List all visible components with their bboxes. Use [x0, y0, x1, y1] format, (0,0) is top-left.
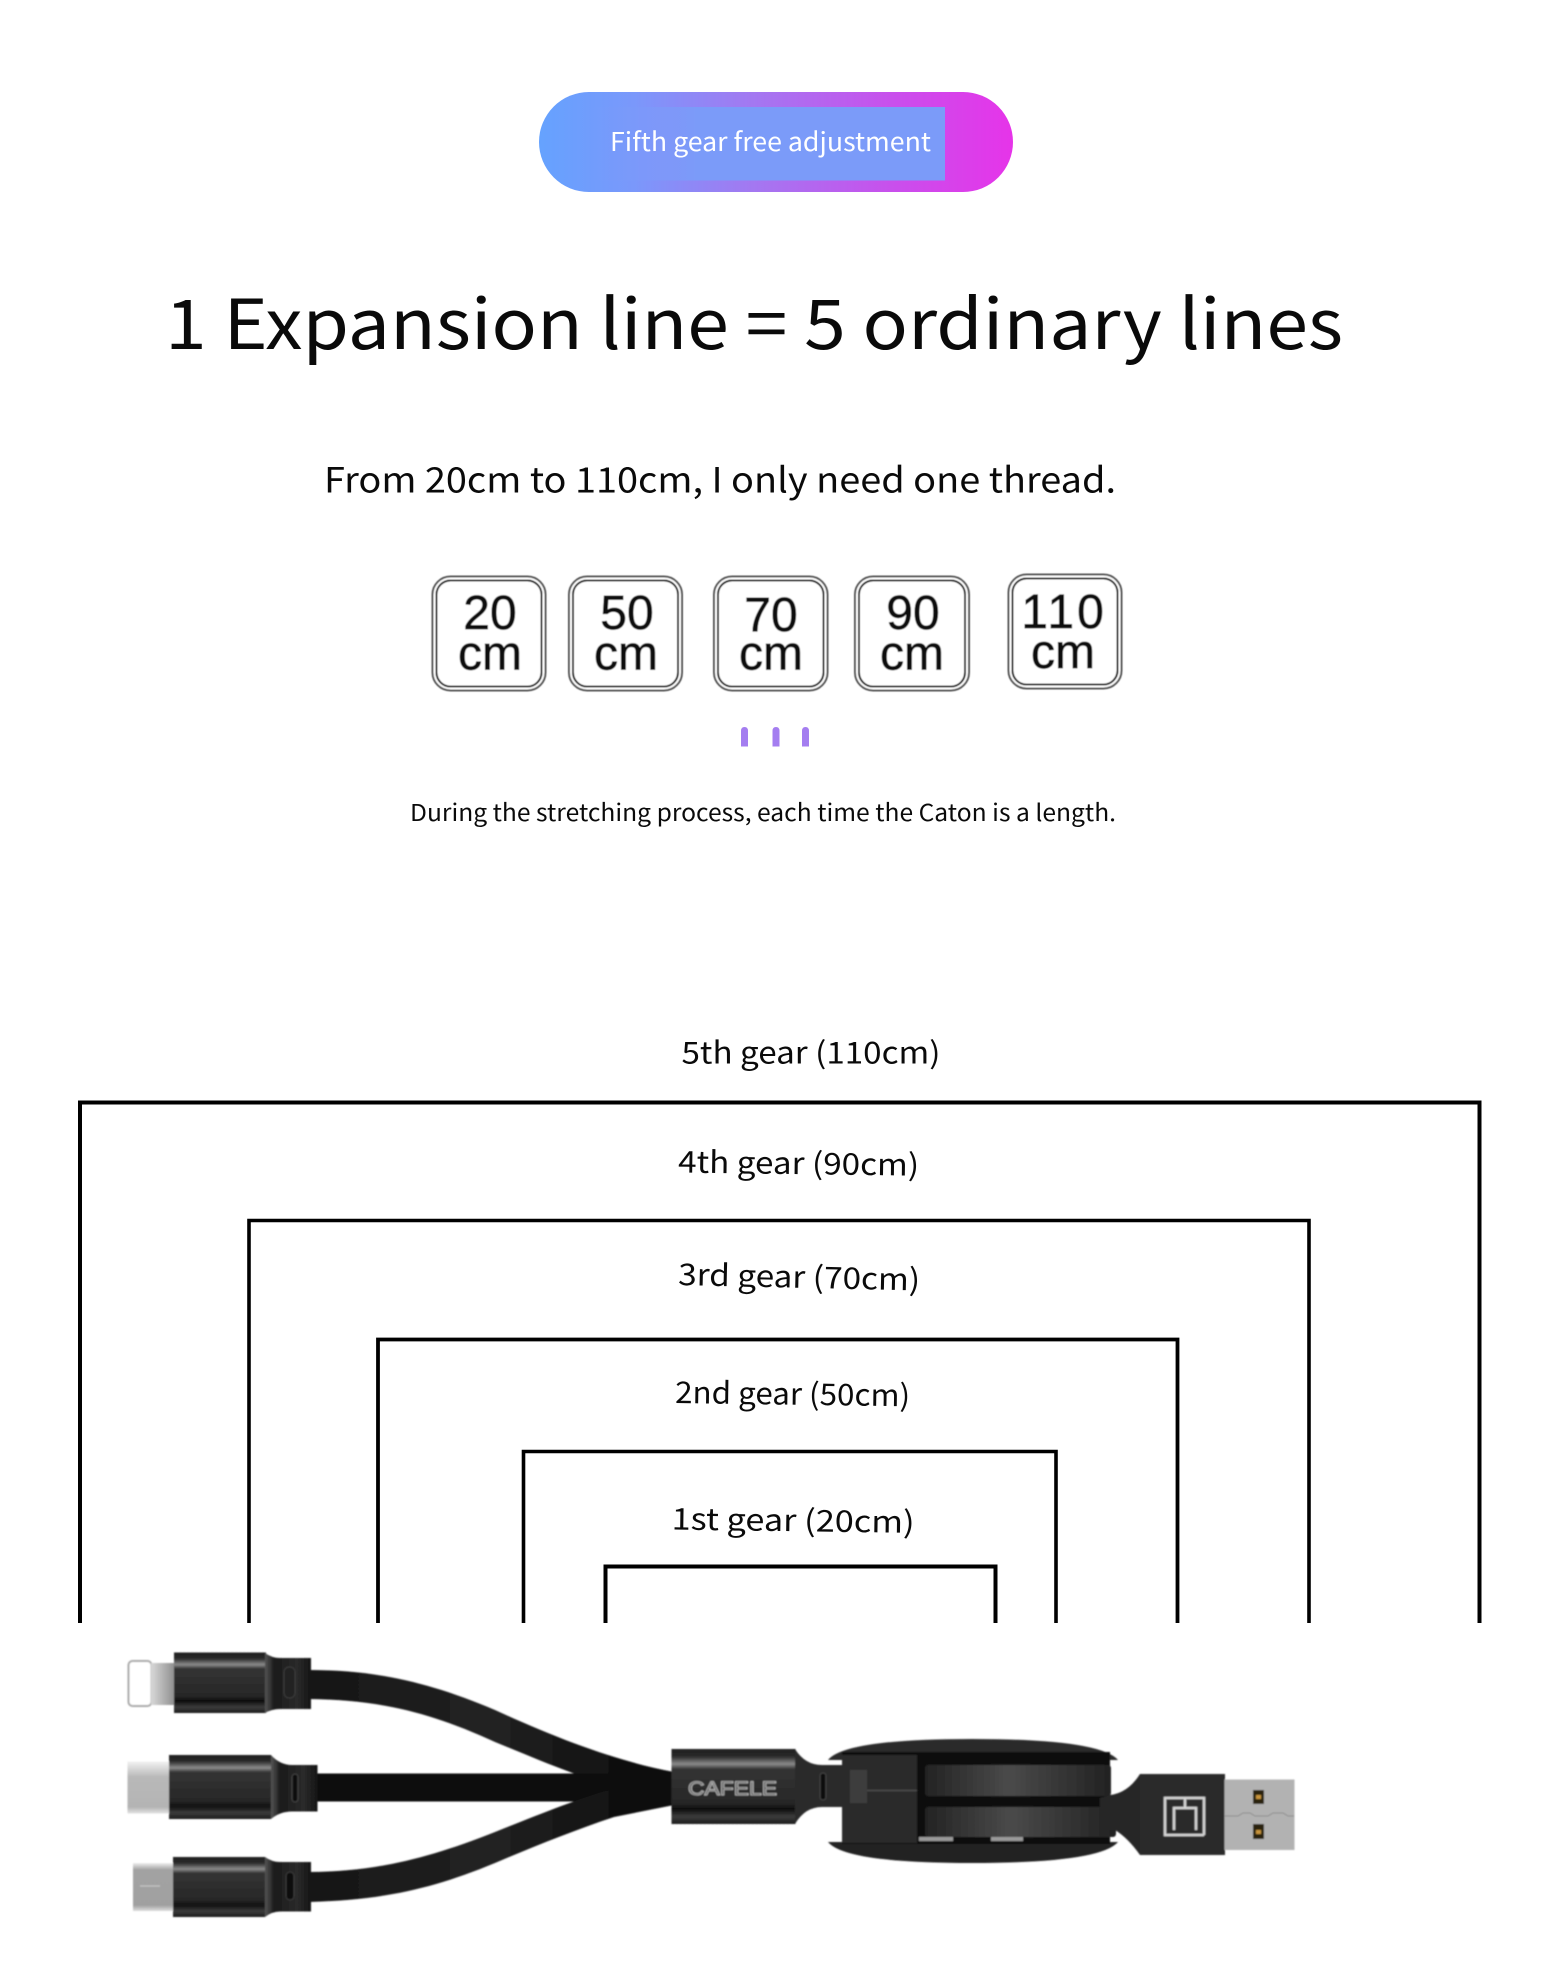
micro-USB connector: [133, 1857, 311, 1917]
badge: Fifth gear free adjustment: Fifth gear free adjustment: [610, 122, 931, 159]
label: 3rd gear: 3rd gear (70cm): [678, 1250, 921, 1299]
badge: 50 cm: cm: [594, 628, 658, 680]
badge: 110 cm: 110: [1021, 586, 1107, 639]
badge: 70 cm: 70: [744, 589, 798, 642]
product: retractable 3-in-1 cable: [128, 1652, 1294, 1917]
badge: 20 cm: 20: [463, 587, 517, 640]
badge: 90 cm: [855, 576, 969, 690]
USB-A plug: [1100, 1774, 1294, 1855]
badge: 90 cm: cm: [880, 628, 944, 680]
label: 1st gear: 1st gear (20cm): [671, 1495, 915, 1542]
three purple dots: [741, 727, 809, 746]
USB-C connector: [128, 1755, 318, 1819]
label: 5th gear: 5th gear (110cm): [682, 1028, 940, 1072]
caption: During the stretching process, each time the Caton is a length.: [410, 794, 1116, 828]
frame: 1st gear: [606, 1566, 996, 1623]
cable strands: [309, 1670, 674, 1902]
subtitle: From 20cm to 110cm, I only need one thread.: [324, 452, 1116, 504]
badge: 110 cm: [1008, 574, 1122, 688]
length badges row: [432, 574, 1122, 690]
badge: 110 cm: cm: [1031, 626, 1095, 679]
badge: 50 cm: [569, 576, 682, 690]
lightning connector: [128, 1652, 311, 1713]
frame: 5th gear: [80, 1102, 1480, 1623]
icon: logo mark: [1165, 1798, 1204, 1835]
frame: 2nd gear: [524, 1452, 1056, 1623]
title: 1 Expansion line = 5 ordinary lines: [165, 269, 1343, 369]
badge: 20 cm: [432, 576, 546, 690]
frame: 3rd gear: [378, 1340, 1178, 1623]
badge: 90 cm: 90: [886, 587, 940, 640]
badge: 70 cm: [714, 576, 828, 690]
frame: 4th gear: [249, 1220, 1309, 1623]
CAFELE junction housing: CAFELE: [688, 1779, 777, 1800]
badge: Fifth gear free adjustment: [539, 92, 1013, 192]
label: 2nd gear: 2nd gear (50cm): [675, 1368, 910, 1415]
badge: 50 cm: 50: [600, 587, 654, 640]
badge: 70 cm: cm: [739, 628, 803, 680]
CAFELE junction housing: [672, 1749, 850, 1824]
badge: 20 cm: cm: [458, 628, 522, 680]
gear frames diagram: [80, 1028, 1480, 1623]
label: 4th gear: 4th gear (90cm): [678, 1138, 919, 1185]
reel body: [828, 1739, 1118, 1863]
